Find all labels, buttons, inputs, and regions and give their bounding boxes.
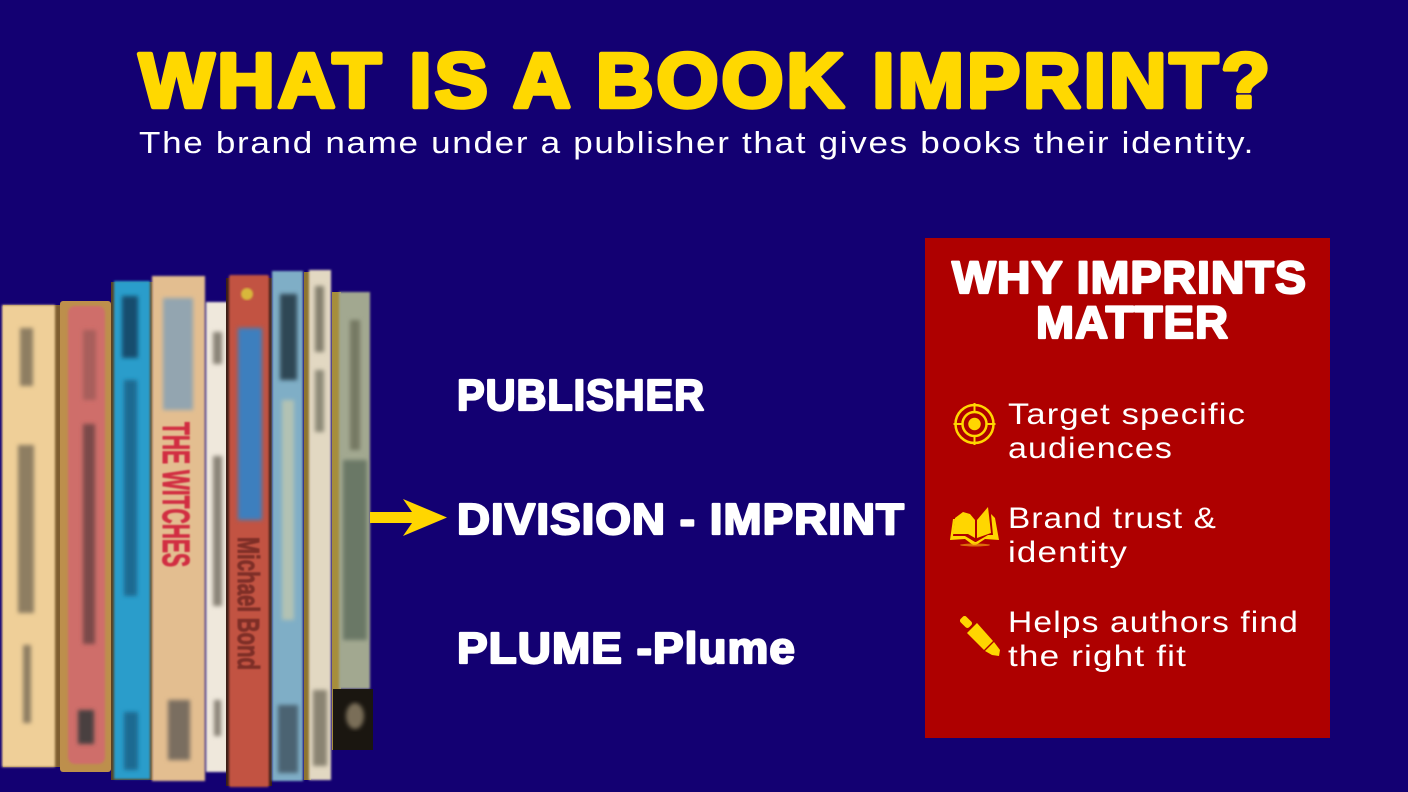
text: target specific audiences: audiences xyxy=(1008,432,1173,465)
label: division - imprint: DIVISION - IMPRINT xyxy=(457,495,905,544)
book 7: pale blue spine xyxy=(272,271,303,781)
book 6: red spine, Michael Bond xyxy=(226,275,272,787)
label: plume: PLUME -Plume xyxy=(457,624,796,673)
arrow xyxy=(370,499,447,536)
panel heading: MATTER xyxy=(1036,297,1229,348)
subtitle: The brand name under a publisher that gives books their identity. xyxy=(139,125,1255,160)
book 8: cream spine with gold edge xyxy=(304,270,331,780)
icon: target xyxy=(954,403,996,445)
text: target specific audiences xyxy=(1008,398,1246,465)
text: helps authors find the right fit: the right fit xyxy=(1008,640,1187,673)
book 4: The Witches spine xyxy=(152,276,205,781)
icon: pencil xyxy=(959,615,1000,656)
panel heading xyxy=(952,252,1307,348)
text: brand trust and identity xyxy=(1008,502,1217,569)
title: WHAT IS A BOOK IMPRINT? xyxy=(139,38,1273,124)
text: target specific audiences: Target specific xyxy=(1008,398,1246,431)
book 1: cream spine xyxy=(2,305,60,767)
panel heading: WHY IMPRINTS xyxy=(952,252,1307,303)
book 3: blue spine xyxy=(111,281,153,780)
illustration: row of book spines xyxy=(2,270,373,787)
text: helps authors find the right fit: Helps authors find xyxy=(1008,606,1299,639)
book 5: white spine xyxy=(206,302,229,772)
book 9: grey-green spine xyxy=(332,292,373,750)
book 4: The Witches spine: THE WITCHES xyxy=(154,422,196,567)
icon: open book xyxy=(950,507,999,546)
text: brand trust and identity: identity xyxy=(1008,536,1128,569)
text: helps authors find the right fit xyxy=(1008,606,1299,673)
label: publisher: PUBLISHER xyxy=(457,371,705,420)
panel: why imprints matter xyxy=(925,238,1330,738)
book 6: red spine, Michael Bond: Michael Bond xyxy=(231,537,266,670)
book 2: pink spine xyxy=(60,301,111,772)
text: brand trust and identity: Brand trust & xyxy=(1008,502,1217,535)
